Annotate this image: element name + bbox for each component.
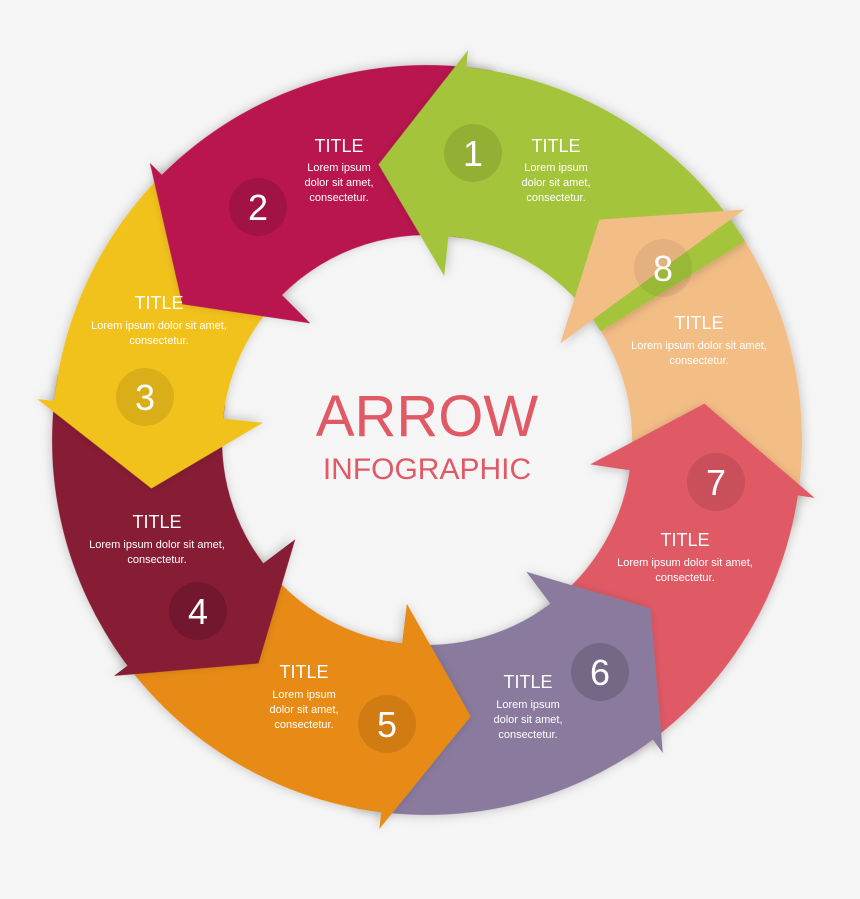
step 8 text: Lorem ipsum dolor sit amet, (631, 340, 767, 352)
step 5 text: consectetur. (274, 719, 334, 731)
step 2 text: consectetur. (309, 192, 369, 204)
step 5 text (269, 662, 416, 753)
step 6 text: dolor sit amet, (493, 714, 563, 726)
step 4 text (89, 512, 227, 640)
arrow 1: green (364, 42, 762, 345)
step 1 text: TITLE (531, 136, 581, 156)
step 4 text: 4 (188, 591, 208, 632)
step 2 text: 2 (248, 187, 268, 228)
arrow 4: dark red (0, 305, 362, 737)
arrow 8: peach (491, 147, 860, 590)
step 6 text: 6 (590, 652, 610, 693)
step 3 text: TITLE (134, 293, 184, 313)
step 2 text: dolor sit amet, (304, 177, 374, 189)
step 2 text: TITLE (314, 136, 364, 156)
arrowhead 8 on top (515, 147, 744, 343)
step 3 text: 3 (135, 377, 155, 418)
step 6 text: Lorem ipsum (496, 699, 560, 711)
center title: INFOGRAPHIC (323, 453, 531, 486)
step 7 text: Lorem ipsum dolor sit amet, (617, 557, 753, 569)
step 6 text: consectetur. (498, 729, 558, 741)
step 3 text (91, 293, 227, 426)
arrow 5: orange (94, 536, 487, 838)
step 8 text: consectetur. (669, 355, 729, 367)
step 2 text: Lorem ipsum (307, 162, 371, 174)
step 4 text: Lorem ipsum dolor sit amet, (89, 539, 225, 551)
center title: ARROW (316, 384, 538, 449)
step 1 text: Lorem ipsum (524, 162, 588, 174)
step 5 text: TITLE (279, 662, 329, 682)
arrow 3: yellow (29, 145, 305, 501)
step 2 text (229, 136, 374, 236)
step 6 text: TITLE (503, 672, 553, 692)
step 1 text: dolor sit amet, (521, 177, 591, 189)
step 8 text (631, 239, 767, 367)
step 1 text: 1 (463, 133, 483, 174)
step 7 text (617, 453, 753, 584)
step 6 text (493, 643, 629, 741)
step 7 text: TITLE (660, 530, 710, 550)
step 5 text: dolor sit amet, (269, 704, 339, 716)
arrow 7: red (518, 384, 826, 778)
center title (316, 384, 538, 486)
step 5 text: 5 (377, 704, 397, 745)
step 3 text: consectetur. (129, 335, 189, 347)
step 8 text: 8 (653, 248, 673, 289)
step 1 text: consectetur. (526, 192, 586, 204)
arrow 6: purple (287, 503, 724, 899)
step 4 text: TITLE (132, 512, 182, 532)
step 1 text (444, 124, 591, 204)
step 3 text: Lorem ipsum dolor sit amet, (91, 320, 227, 332)
step 7 text: 7 (706, 462, 726, 503)
step 5 text: Lorem ipsum (272, 689, 336, 701)
step 4 text: consectetur. (127, 554, 187, 566)
step 8 text: TITLE (674, 313, 724, 333)
arrow 2: crimson (95, 0, 561, 411)
step 7 text: consectetur. (655, 572, 715, 584)
